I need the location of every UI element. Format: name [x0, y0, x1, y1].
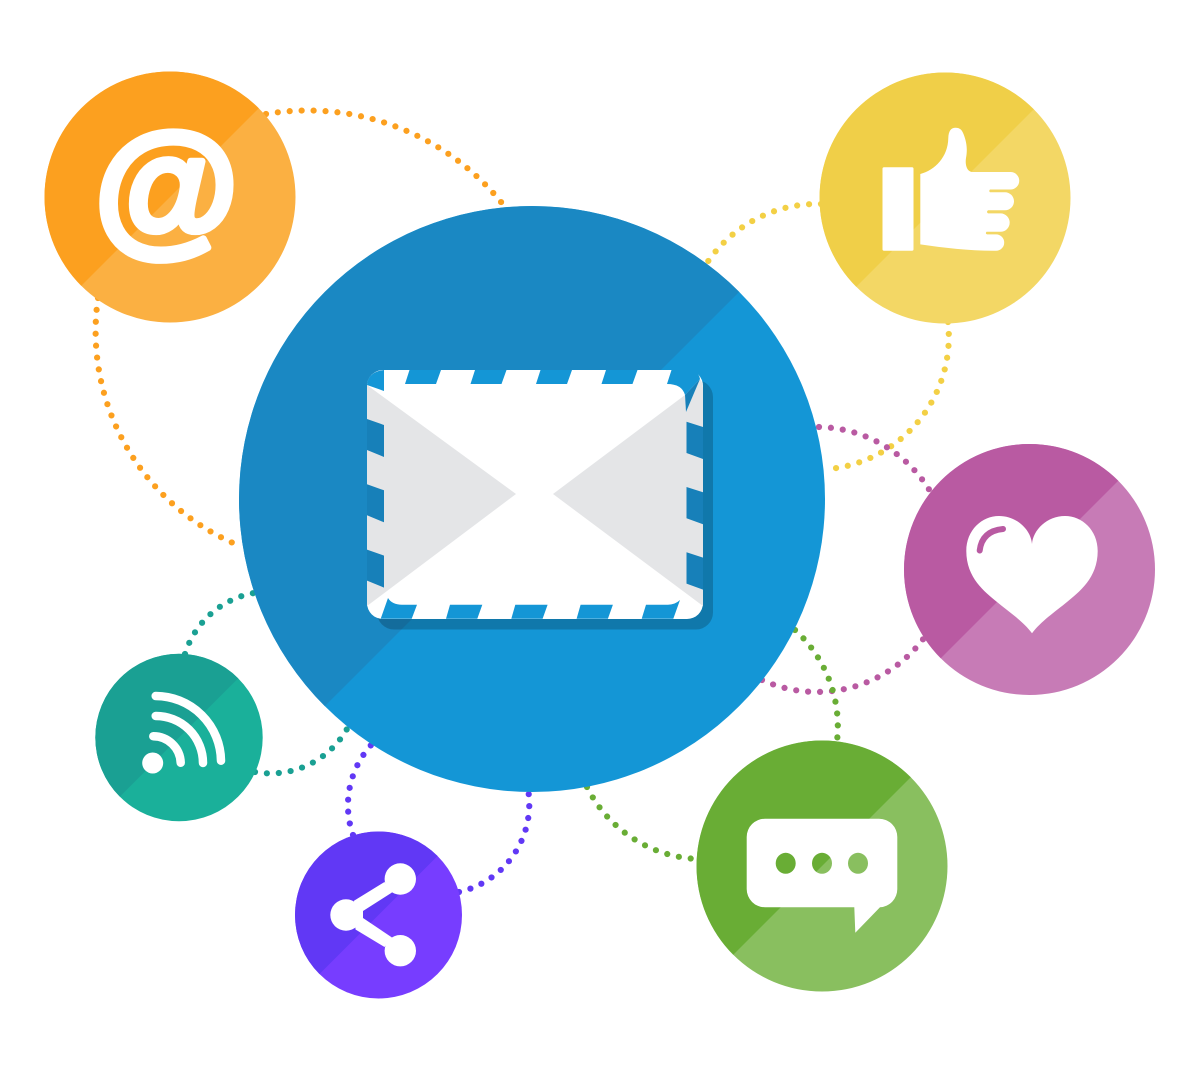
dotted connector: green — [587, 630, 838, 859]
icon: at sign: @ — [94, 104, 239, 269]
icon: heart — [966, 516, 1098, 633]
icon: rss feed — [142, 696, 221, 774]
bottom border stripes — [381, 598, 680, 619]
icon: heart highlight — [980, 529, 1003, 550]
icon: thumbs up — [882, 128, 1019, 251]
envelope right fold — [553, 379, 703, 606]
dotted connector: violet — [348, 742, 529, 892]
envelope body — [367, 370, 703, 619]
disc: heart — [904, 444, 1155, 695]
dotted connector: orange — [96, 111, 505, 546]
disc: share — [295, 832, 462, 998]
dotted connector: teal — [185, 592, 347, 773]
top border stripes — [367, 370, 700, 395]
envelope shadow — [377, 380, 713, 630]
dotted connector: pink — [762, 427, 930, 692]
disc: at sign — [44, 72, 296, 322]
left border stripes — [367, 419, 384, 588]
disc: rss feed — [95, 654, 263, 821]
central email disc — [239, 206, 825, 792]
disc: thumbs up — [820, 72, 1070, 324]
right border stripes — [686, 422, 703, 590]
dotted connector: yellow — [705, 204, 949, 469]
corner flap shading — [685, 379, 700, 412]
disc: chat bubble — [696, 740, 948, 992]
envelope left fold — [367, 385, 516, 606]
icon: envelope — [367, 370, 713, 630]
icon: chat bubble — [747, 819, 897, 933]
icon: share — [330, 863, 416, 966]
